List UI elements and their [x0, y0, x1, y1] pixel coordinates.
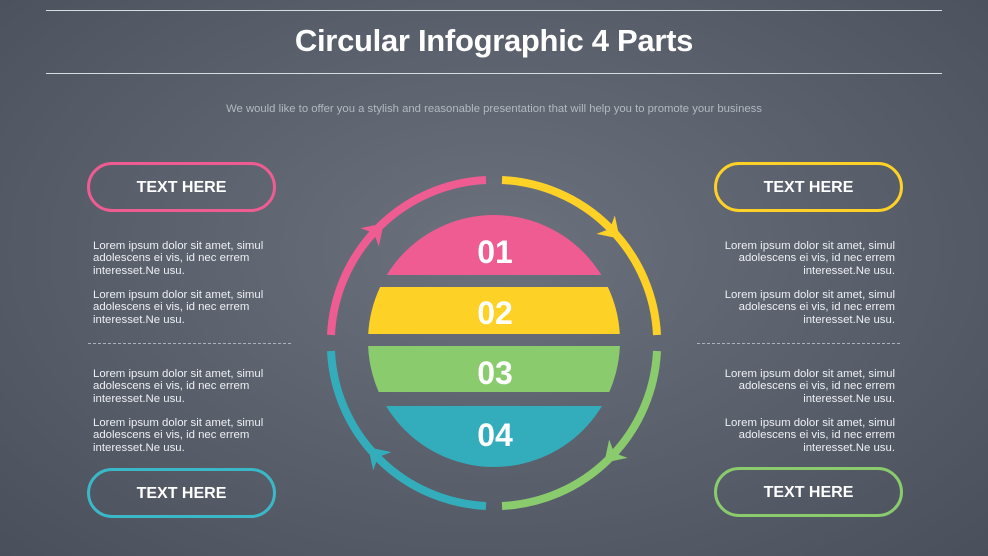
text: bottom left	[93, 368, 263, 454]
pill: bottom right: TEXT HERE	[764, 484, 853, 501]
text: top right: Lorem ipsum dolor sit amet, simul adolescens ei vis, id nec errem interesset.Ne usu.	[725, 289, 895, 326]
pill: bottom right	[714, 467, 903, 517]
pill: bottom left: TEXT HERE	[137, 485, 226, 502]
pill: top left	[87, 162, 276, 212]
number 04: 04	[477, 417, 513, 453]
pill: top right	[714, 162, 903, 212]
subtitle: We would like to offer you a stylish and reasonable presentation that will help you to promote your business	[226, 103, 762, 115]
text: bottom left: Lorem ipsum dolor sit amet, simul adolescens ei vis, id nec errem interesset.Ne usu.	[93, 417, 263, 454]
text: top right: Lorem ipsum dolor sit amet, simul adolescens ei vis, id nec errem interesset.Ne usu.	[725, 240, 895, 277]
arrow: teal	[359, 438, 392, 471]
number 01: 01	[477, 234, 513, 270]
arrow: pink	[360, 214, 393, 247]
band 02	[360, 287, 630, 334]
arc: pink	[331, 180, 486, 335]
band 04	[386, 406, 602, 467]
arrow: yellow	[596, 215, 629, 248]
text: top left: Lorem ipsum dolor sit amet, simul adolescens ei vis, id nec errem interesset.Ne usu.	[93, 240, 263, 277]
text: bottom left: Lorem ipsum dolor sit amet, simul adolescens ei vis, id nec errem interesset.Ne usu.	[93, 368, 263, 405]
pill: top left: TEXT HERE	[137, 179, 226, 196]
title: Circular Infographic 4 Parts	[295, 23, 693, 58]
text: bottom right: Lorem ipsum dolor sit amet, simul adolescens ei vis, id nec errem interesset.Ne usu.	[725, 417, 895, 454]
number 03: 03	[477, 355, 513, 391]
band 03	[360, 346, 630, 392]
band 01	[386, 215, 602, 275]
arrow: green	[595, 439, 628, 472]
text: bottom right	[725, 368, 895, 454]
arc: teal	[331, 351, 486, 506]
circular diagram	[327, 176, 661, 510]
arc: yellow	[502, 180, 657, 335]
number 02: 02	[477, 295, 513, 331]
text: top right	[725, 240, 895, 326]
text: top left: Lorem ipsum dolor sit amet, simul adolescens ei vis, id nec errem interesset.Ne usu.	[93, 289, 263, 326]
pill: top right: TEXT HERE	[764, 179, 853, 196]
text: bottom right: Lorem ipsum dolor sit amet, simul adolescens ei vis, id nec errem interesset.Ne usu.	[725, 368, 895, 405]
pill: bottom left	[87, 468, 276, 518]
text: top left	[93, 240, 263, 326]
arc: green	[502, 351, 657, 506]
